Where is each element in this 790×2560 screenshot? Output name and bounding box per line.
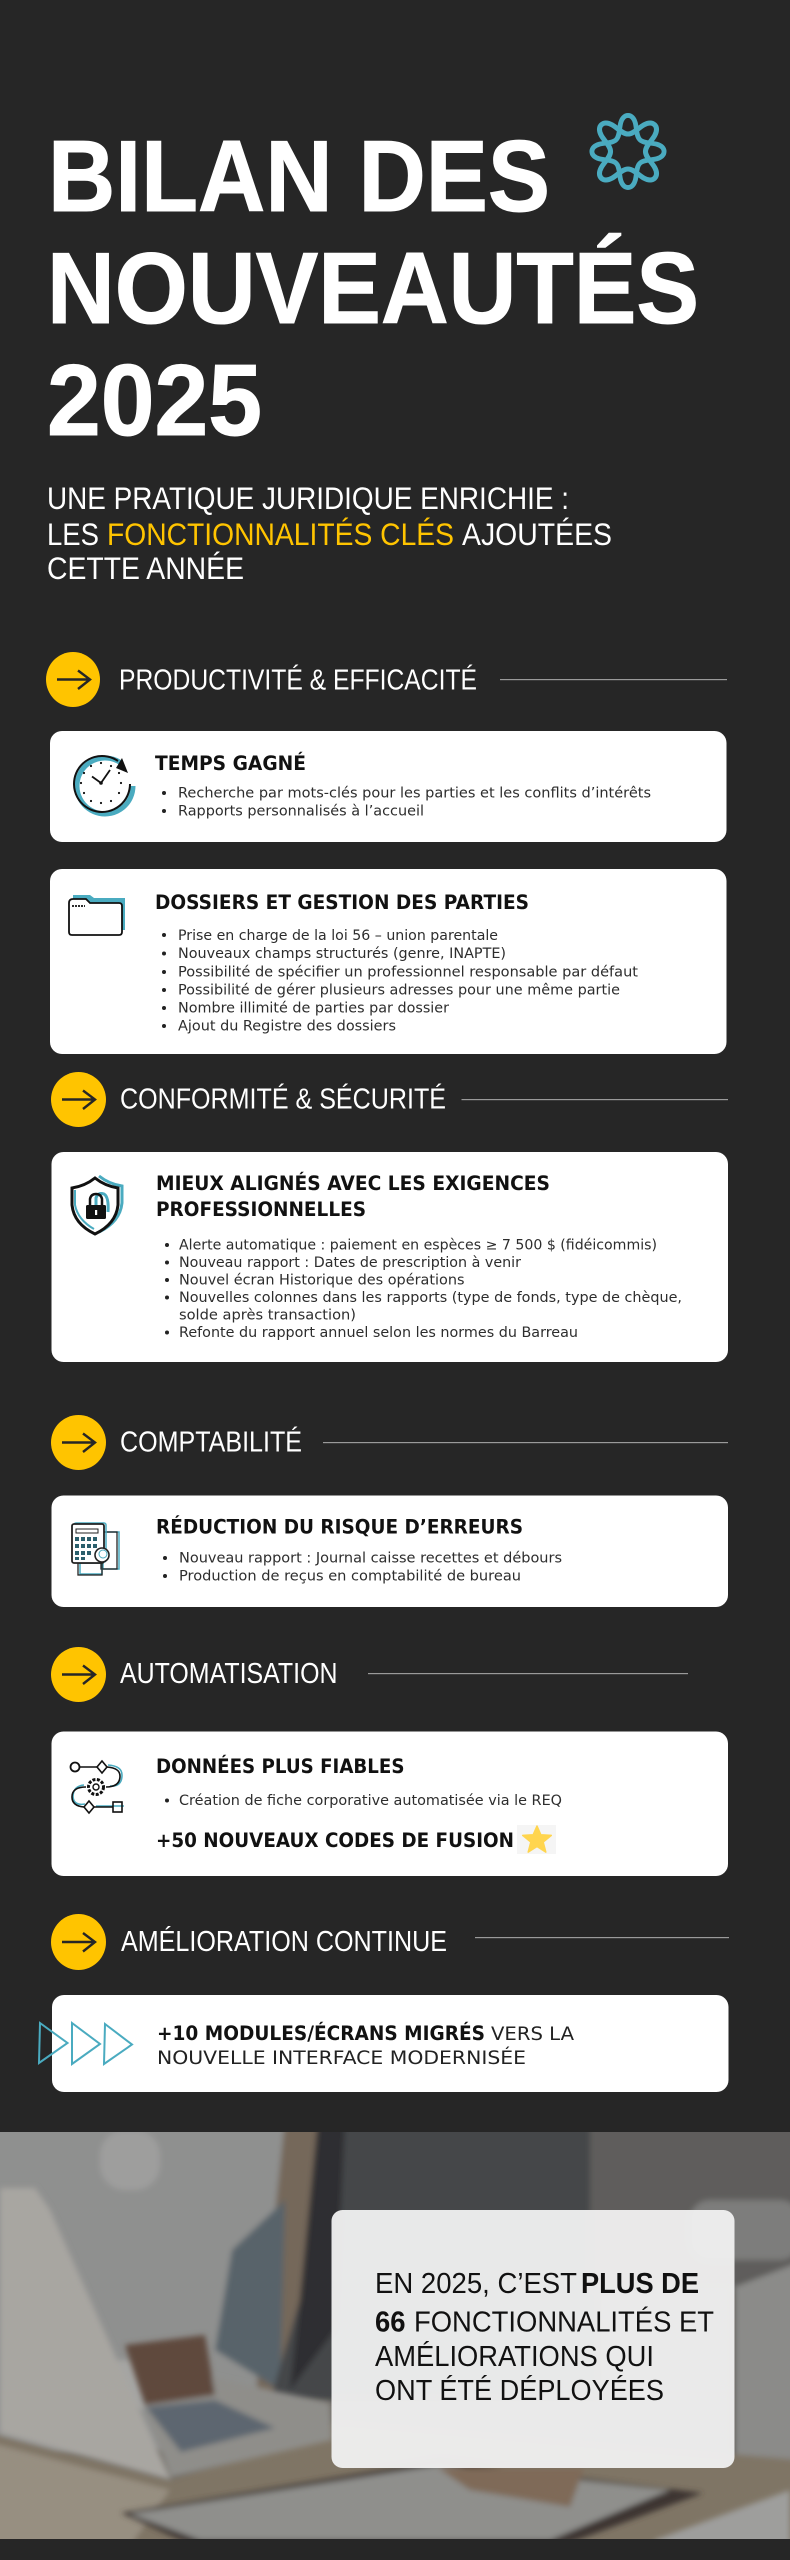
icon: teal knot logo [589,113,667,190]
heading: MIEUX ALIGNÉS AVEC LES EXIGENCES [156,1172,550,1195]
section header: productivité [46,652,727,707]
text [157,2022,574,2069]
icon: clock [74,756,133,814]
section header: amélioration continue [51,1914,729,1970]
title: NOUVEAUTÉS [47,233,699,345]
bullet: Création de fiche corporative automatisée via le REQ [179,1793,562,1809]
callout: plus de 66 fonctionnalités: 66 [375,2306,406,2338]
bullet list: Nouvelles colonnes dans les rapports (type de fonds, type de chèque, [179,1290,682,1306]
bullet list: Nouveau rapport : Dates de prescription à venir [179,1255,521,1271]
heading: DONNÉES PLUS FIABLES [156,1755,404,1778]
bullet list: Ajout du Registre des dossiers [178,1018,396,1034]
text: NOUVELLE INTERFACE MODERNISÉE [157,2046,526,2069]
subtitle [47,480,612,586]
heading: RÉDUCTION DU RISQUE D’ERREURS [156,1516,523,1538]
section header: automatisation: AUTOMATISATION [120,1658,338,1690]
panel: dossiers [50,869,726,1054]
title: 2025 [47,345,262,457]
bullet list [162,928,639,1034]
section header: conformité [51,1072,728,1127]
section header: comptabilité [51,1415,728,1470]
bullet list: Nouveaux champs structurés (genre, INAPTE) [178,946,506,962]
bullet list [162,786,651,820]
heading [156,1172,550,1221]
callout: plus de 66 fonctionnalités: PLUS DE [581,2268,699,2300]
text: VERS LA [491,2023,574,2045]
subtitle: FONCTIONNALITÉS CLÉS [107,516,454,552]
section header: comptabilité: COMPTABILITÉ [120,1426,302,1458]
callout: plus de 66 fonctionnalités: AMÉLIORATIONS QUI [375,2340,654,2373]
panel: réduction du risque [52,1496,728,1607]
bullet list: Rapports personnalisés à l’accueil [178,804,424,820]
icon: triple triangles [39,2023,132,2064]
panel: temps gagné [50,731,726,842]
text: +10 MODULES/ÉCRANS MIGRÉS [157,2022,485,2045]
icon: folder [69,895,125,935]
bullet list: Nombre illimité de parties par dossier [178,1000,449,1016]
callout: codes de fusion: +50 NOUVEAUX CODES DE FUSION [156,1829,514,1852]
icon: star [517,1825,556,1854]
callout: plus de 66 fonctionnalités: ONT ÉTÉ DÉPLOYÉES [375,2374,664,2407]
bullet list: solde après transaction) [179,1308,356,1324]
bullet list: Possibilité de gérer plusieurs adresses pour une même partie [178,982,620,998]
section header: automatisation [51,1647,688,1702]
heading: PROFESSIONNELLES [156,1198,366,1221]
callout: plus de 66 fonctionnalités: FONCTIONNALITÉS ET [414,2306,714,2338]
subtitle: AJOUTÉES [462,516,612,552]
bullet list: Production de reçus en comptabilité de bureau [179,1568,521,1584]
bullet list: Alerte automatique : paiement en espèces ≥ 7 500 $ (fidéicommis) [179,1238,657,1254]
title: BILAN DES [48,121,550,233]
bullet list: Nouvel écran Historique des opérations [179,1272,464,1288]
subtitle: CETTE ANNÉE [47,550,244,586]
panel: données plus fiables [52,1732,728,1876]
photo: laptop and signing hand [0,2120,790,2560]
panel: modules migrés [39,1995,728,2092]
icon: shield with padlock [72,1176,122,1234]
icon: workflow gear [70,1761,124,1813]
panel: exigences professionnelles [52,1152,728,1362]
section header: conformité: CONFORMITÉ & SÉCURITÉ [120,1084,446,1116]
bullet list: Refonte du rapport annuel selon les normes du Barreau [179,1325,578,1341]
heading: DOSSIERS ET GESTION DES PARTIES [155,891,529,914]
callout: plus de 66 fonctionnalités: EN 2025, C’EST [375,2268,577,2300]
bullet list [163,1550,562,1584]
heading: TEMPS GAGNÉ [155,752,306,775]
bullet list [165,1238,682,1341]
bullet list: Possibilité de spécifier un professionnel responsable par défaut [178,964,639,980]
bullet list: Recherche par mots-clés pour les parties et les conflits d’intérêts [178,786,651,802]
icon: calculator [72,1523,119,1575]
subtitle: UNE PRATIQUE JURIDIQUE ENRICHIE : [47,480,569,516]
subtitle: LES [47,516,99,552]
section header: productivité: PRODUCTIVITÉ & EFFICACITÉ [119,664,477,696]
bullet list: Prise en charge de la loi 56 – union parentale [178,928,498,944]
callout: plus de 66 fonctionnalités [332,2210,734,2468]
title [47,121,699,457]
bullet list: Nouveau rapport : Journal caisse recettes et débours [179,1550,562,1566]
section header: amélioration continue: AMÉLIORATION CONTINUE [121,1926,447,1958]
